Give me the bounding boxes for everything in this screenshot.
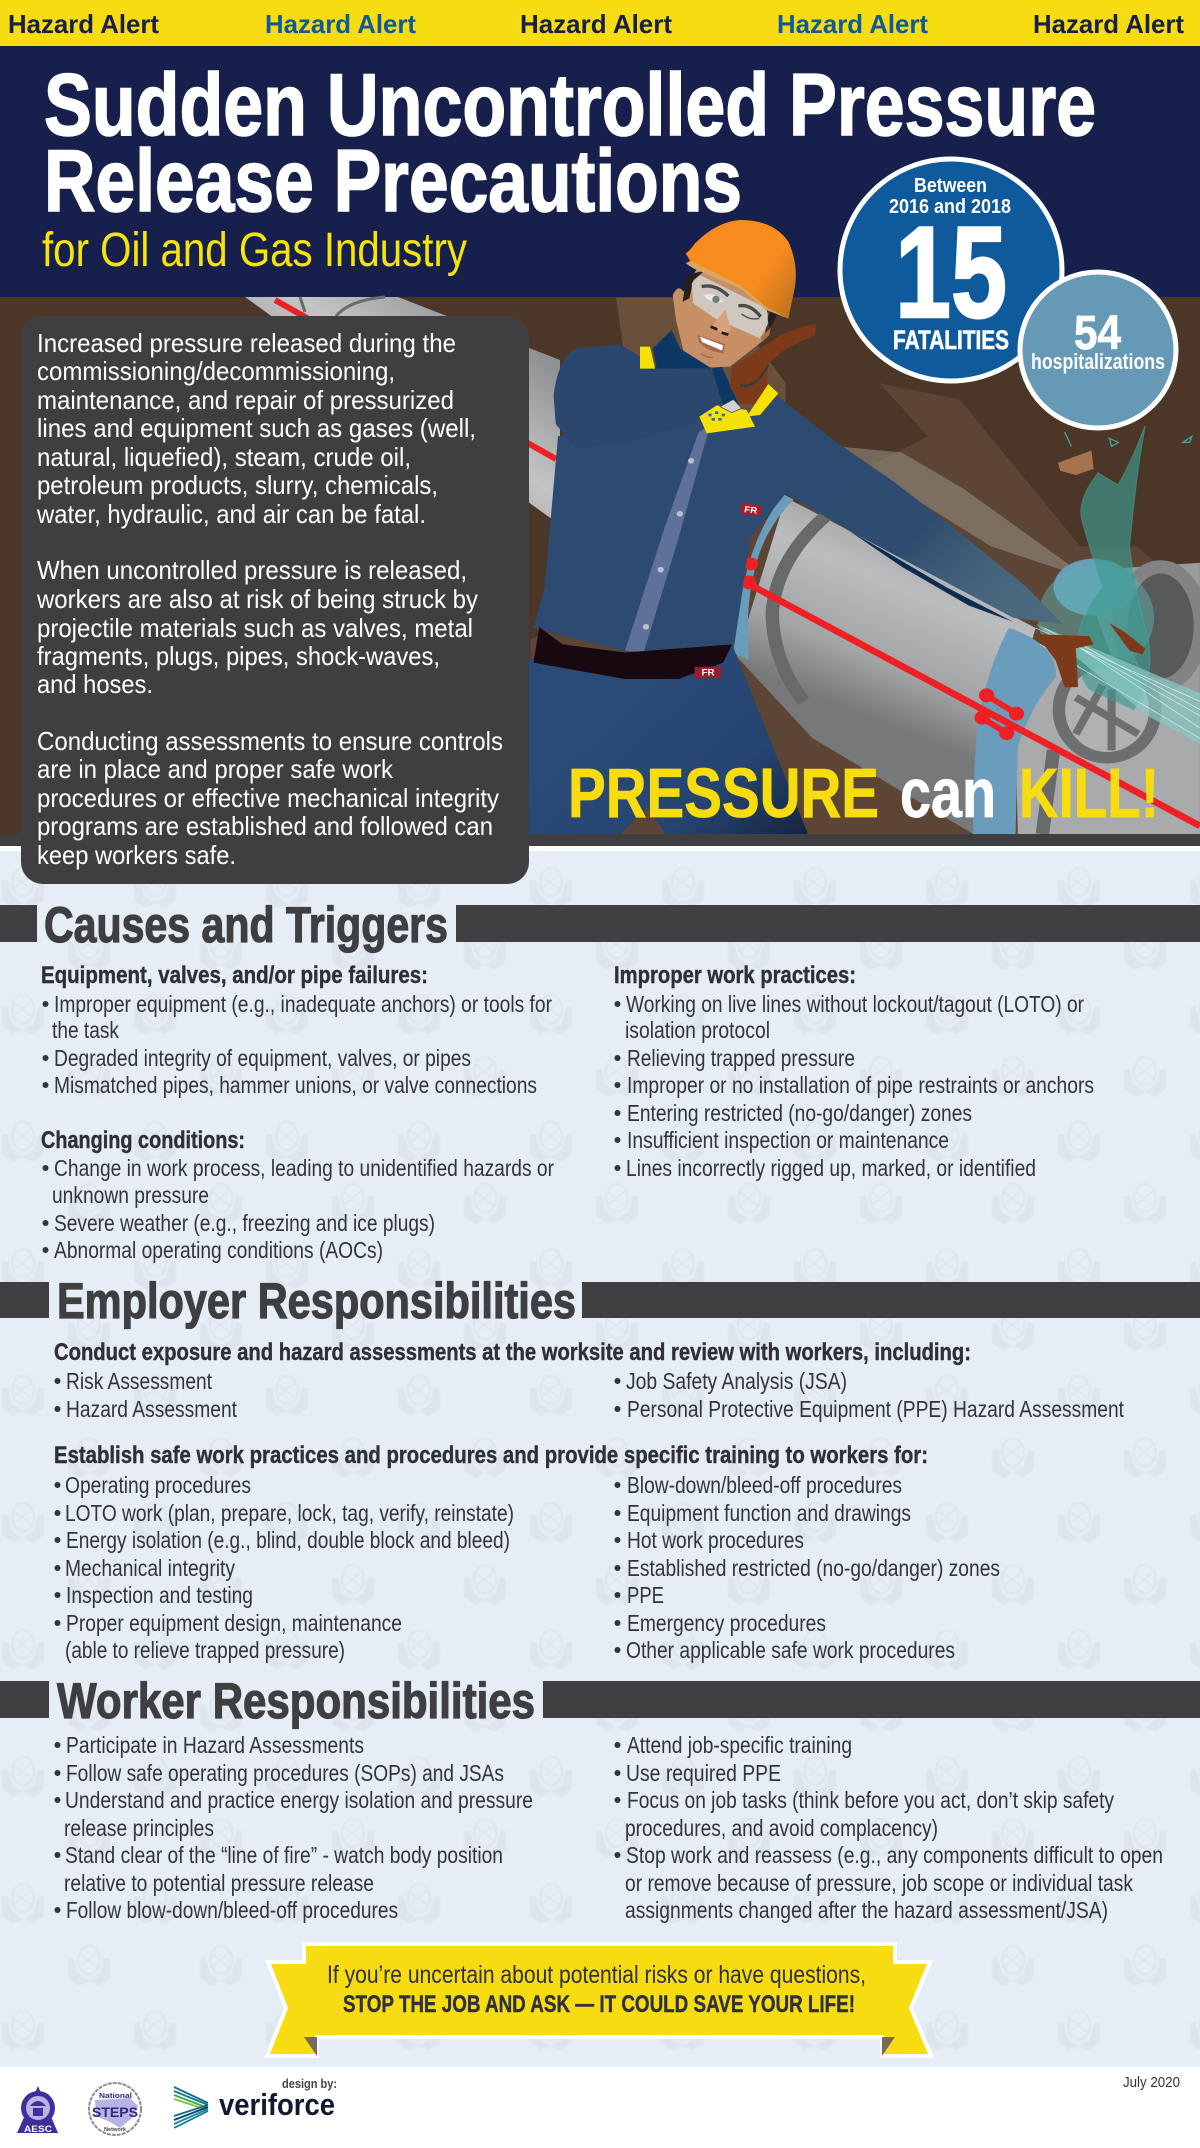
panel: worker responsibilities, right column: procedures, and avoid complacency) [625,1815,938,1841]
intro text panel: petroleum products, slurry, chemicals, [37,470,438,500]
panel: causes, right column: Entering restricted (no-go/danger) zones [627,1100,972,1126]
worker head and hand [640,220,816,433]
callout ribbon [267,1944,931,2056]
raised arm [554,344,723,436]
panel: worker responsibilities, left column: Participate in Hazard Assessments [66,1732,364,1758]
design credit: design by: [282,2076,337,2091]
panel: safe work practices: LOTO work (plan, prepare, lock, tag, verify, reinstate) [65,1500,514,1526]
date: July 2020 [1123,2074,1180,2091]
panel: causes, left column: Abnormal operating conditions (AOCs) [54,1237,383,1263]
panel: safe work practices: Inspection and testing [66,1582,253,1608]
section heading: employer responsibilities: Employer Responsibilities [57,1273,576,1329]
intro text panel: and hoses. [37,669,153,699]
pants [529,644,808,834]
panel: causes, right column: Lines incorrectly rigged up, marked, or identified [626,1155,1036,1181]
panel: causes, right column: Relieving trapped pressure [627,1045,855,1071]
panel: safe work practices: Equipment function and drawings [627,1500,911,1526]
stat: 15 fatalities circle: FATALITIES [893,325,1009,355]
section heading: worker responsibilities [0,1673,1200,1729]
panel: hazard assessments: Risk Assessment [66,1368,213,1394]
panel: worker responsibilities, left column: Follow safe operating procedures (SOPs) and JSAs [66,1760,504,1786]
FR tag: chest: FR [744,504,758,516]
panel: hazard assessments: Conduct exposure and hazard assessments at the worksite and review with workers, including: [54,1339,971,1366]
panel: hazard assessments: Job Safety Analysis (JSA) [626,1368,847,1394]
logo: veriforce: veriforce [219,2087,335,2122]
callout ribbon: If you’re uncertain about potential risks or have questions, [327,1961,866,1989]
spray [1036,426,1200,744]
panel: worker responsibilities, right column: assignments changed after the hazard assessment/JSA) [625,1897,1108,1923]
panel: worker responsibilities, left column: release principles [64,1815,214,1841]
intro text panel [21,316,529,884]
callout ribbon: STOP THE JOB AND ASK — IT COULD SAVE YOUR LIFE! [343,1991,855,2018]
intro text panel: fragments, plugs, pipes, shock-waves, [37,641,440,671]
intro text panel: commissioning/decommissioning, [37,356,395,386]
panel: causes, left column: Changing conditions: [41,1127,245,1154]
panel: worker responsibilities, right column: Use required PPE [626,1760,781,1786]
panel: safe work practices: (able to relieve trapped pressure) [65,1637,345,1663]
slogan: pressure can kill: KILL! [1019,754,1159,832]
intro text panel: water, hydraulic, and air can be fatal. [36,499,426,529]
intro text panel: When uncontrolled pressure is released, [37,555,467,585]
panel: causes, left column: Equipment, valves, and/or pipe failures: [41,962,428,989]
logo: veriforce [174,2076,337,2128]
intro text panel: natural, liquefied), steam, crude oil, [37,442,411,472]
flange ring [772,516,826,701]
panel: causes, right column: Improper work practices: [614,962,856,989]
intro text panel: procedures or effective mechanical integrity [37,783,499,813]
title header panel [0,46,1200,298]
intro text panel: are in place and proper safe work [37,754,394,784]
section heading: employer responsibilities [0,1273,1200,1329]
worker body [529,344,1062,834]
hazard alert banner: Hazard Alert [265,9,416,39]
stat: 54 hospitalizations circle [1020,272,1176,428]
stat: 15 fatalities circle [840,159,1062,381]
intro text panel: Increased pressure released during the [37,328,456,358]
panel: causes, right column: Insufficient inspection or maintenance [627,1127,949,1153]
panel: safe work practices: PPE [627,1582,664,1608]
hazard alert banner: Hazard Alert [1033,9,1184,39]
FR tag: belt [695,667,721,678]
panel: causes, right column [614,962,1094,1181]
intro text panel: keep workers safe. [37,840,236,870]
panel: worker responsibilities, left column: Follow blow-down/bleed-off procedures [66,1897,398,1923]
panel: safe work practices: Operating procedures [65,1472,251,1498]
stat: 54 hospitalizations circle: 54 [1074,307,1121,360]
panel: causes, left column: Mismatched pipes, hammer unions, or valve connections [54,1072,537,1098]
panel: causes, right column: Improper or no installation of pipe restraints or anchors [627,1072,1094,1098]
pipe section [737,497,1036,834]
panel: safe work practices: Emergency procedures [627,1610,826,1636]
logo: National STEPS Network: National [99,2093,132,2100]
hazard alert banner: Hazard Alert [8,9,159,39]
panel: safe work practices: Blow-down/bleed-off procedures [627,1472,902,1498]
logo: National STEPS Network: Network [104,2127,126,2133]
intro text panel: programs are established and followed can [37,811,493,841]
panel: worker responsibilities, left column: relative to potential pressure release [64,1870,374,1896]
logo: AESC [17,2086,58,2134]
panel: safe work practices: Proper equipment design, maintenance [66,1610,402,1636]
panel: worker responsibilities, left column: Understand and practice energy isolation and pressure [65,1787,533,1813]
neck and collar [640,330,740,417]
section heading: worker responsibilities: Worker Responsibilities [57,1673,535,1729]
section heading: causes and triggers [0,897,1200,953]
logo: AESC: AESC [24,2124,53,2134]
hazard alert banner: Hazard Alert [777,9,928,39]
FR tag: belt: FR [701,667,715,678]
panel: hazard assessments [54,1339,1125,1422]
valve wheel [1059,567,1200,758]
stat: 54 hospitalizations circle: hospitalizations [1031,349,1165,374]
jacket [533,395,1062,652]
panel: safe work practices: Other applicable safe work procedures [626,1637,955,1663]
stat: 15 fatalities circle: Between [914,175,987,197]
panel: safe work practices: Established restricted (no-go/danger) zones [627,1555,1000,1581]
panel: worker responsibilities, right column: Focus on job tasks (think before you act, don’t skip safety [627,1787,1114,1813]
illustration: worker struck by pressure release [0,297,1200,851]
face [673,263,777,367]
intro text panel: lines and equipment such as gases (well, [37,413,476,443]
pipe wrap [733,494,794,660]
hard hat [686,220,796,319]
intro text panel: Conducting assessments to ensure controls [37,726,503,756]
panel: safe work practices: Energy isolation (e.g., blind, double block and bleed) [66,1527,510,1553]
stat: 15 fatalities circle: 15 [895,199,1007,345]
title second line: Release Precautions [44,131,742,230]
panel: worker responsibilities, left column: Stand clear of the “line of fire” - watch body position [65,1842,503,1868]
panel: causes, left column [41,962,554,1263]
panel: causes, left column: Severe weather (e.g., freezing and ice plugs) [54,1210,435,1236]
panel: causes, left column: Degraded integrity of equipment, valves, or pipes [54,1045,471,1071]
hazard alert banner [0,0,1200,46]
panel: safe work practices: Hot work procedures [627,1527,804,1553]
panel: worker responsibilities, right column [614,1732,1163,1923]
FR tag: chest [740,503,762,516]
slogan: pressure can kill [568,754,1159,832]
belt [533,627,732,679]
intro text panel: workers are also at risk of being struck by [36,584,478,614]
red restraint line [741,557,1200,826]
hazard alert banner: Hazard Alert [520,9,672,39]
panel: causes, left column: Change in work process, leading to unidentified hazards or [54,1155,554,1181]
yellow collar and gas monitor [699,384,778,433]
logo: National STEPS Network: STEPS [92,2104,138,2120]
panel: worker responsibilities, left column [54,1732,533,1923]
page background [0,850,1200,2067]
panel: safe work practices: Mechanical integrity [65,1555,235,1581]
logo: National STEPS Network [89,2083,141,2135]
panel: causes, right column: Working on live lines without lockout/tagout (LOTO) or [626,991,1084,1017]
section heading: causes and triggers: Causes and Triggers [44,897,448,953]
panel: safe work practices [54,1442,1000,1663]
panel: causes, left column: the task [52,1017,119,1043]
background watermark pattern [0,850,1200,2067]
shirt placket [625,426,710,652]
slogan: pressure can kill: PRESSURE [568,754,879,832]
panel: hazard assessments: Hazard Assessment [66,1396,238,1422]
slogan: pressure can kill: can [900,754,996,832]
intro text panel: maintenance, and repair of pressurized [37,385,454,415]
panel: causes, left column: Improper equipment (e.g., inadequate anchors) or tools for [54,991,552,1017]
panel: worker responsibilities, right column: Attend job-specific training [627,1732,852,1758]
stat: 15 fatalities circle: 2016 and 2018 [889,196,1011,218]
intro text panel: projectile materials such as valves, metal [37,613,473,643]
subtitle: for Oil and Gas Industry [42,224,467,277]
glove [730,324,816,404]
panel: causes, right column: isolation protocol [625,1017,770,1043]
panel: safe work practices: Establish safe work practices and procedures and provide specific training to workers for: [54,1442,928,1469]
panel: causes, left column: unknown pressure [52,1182,209,1208]
